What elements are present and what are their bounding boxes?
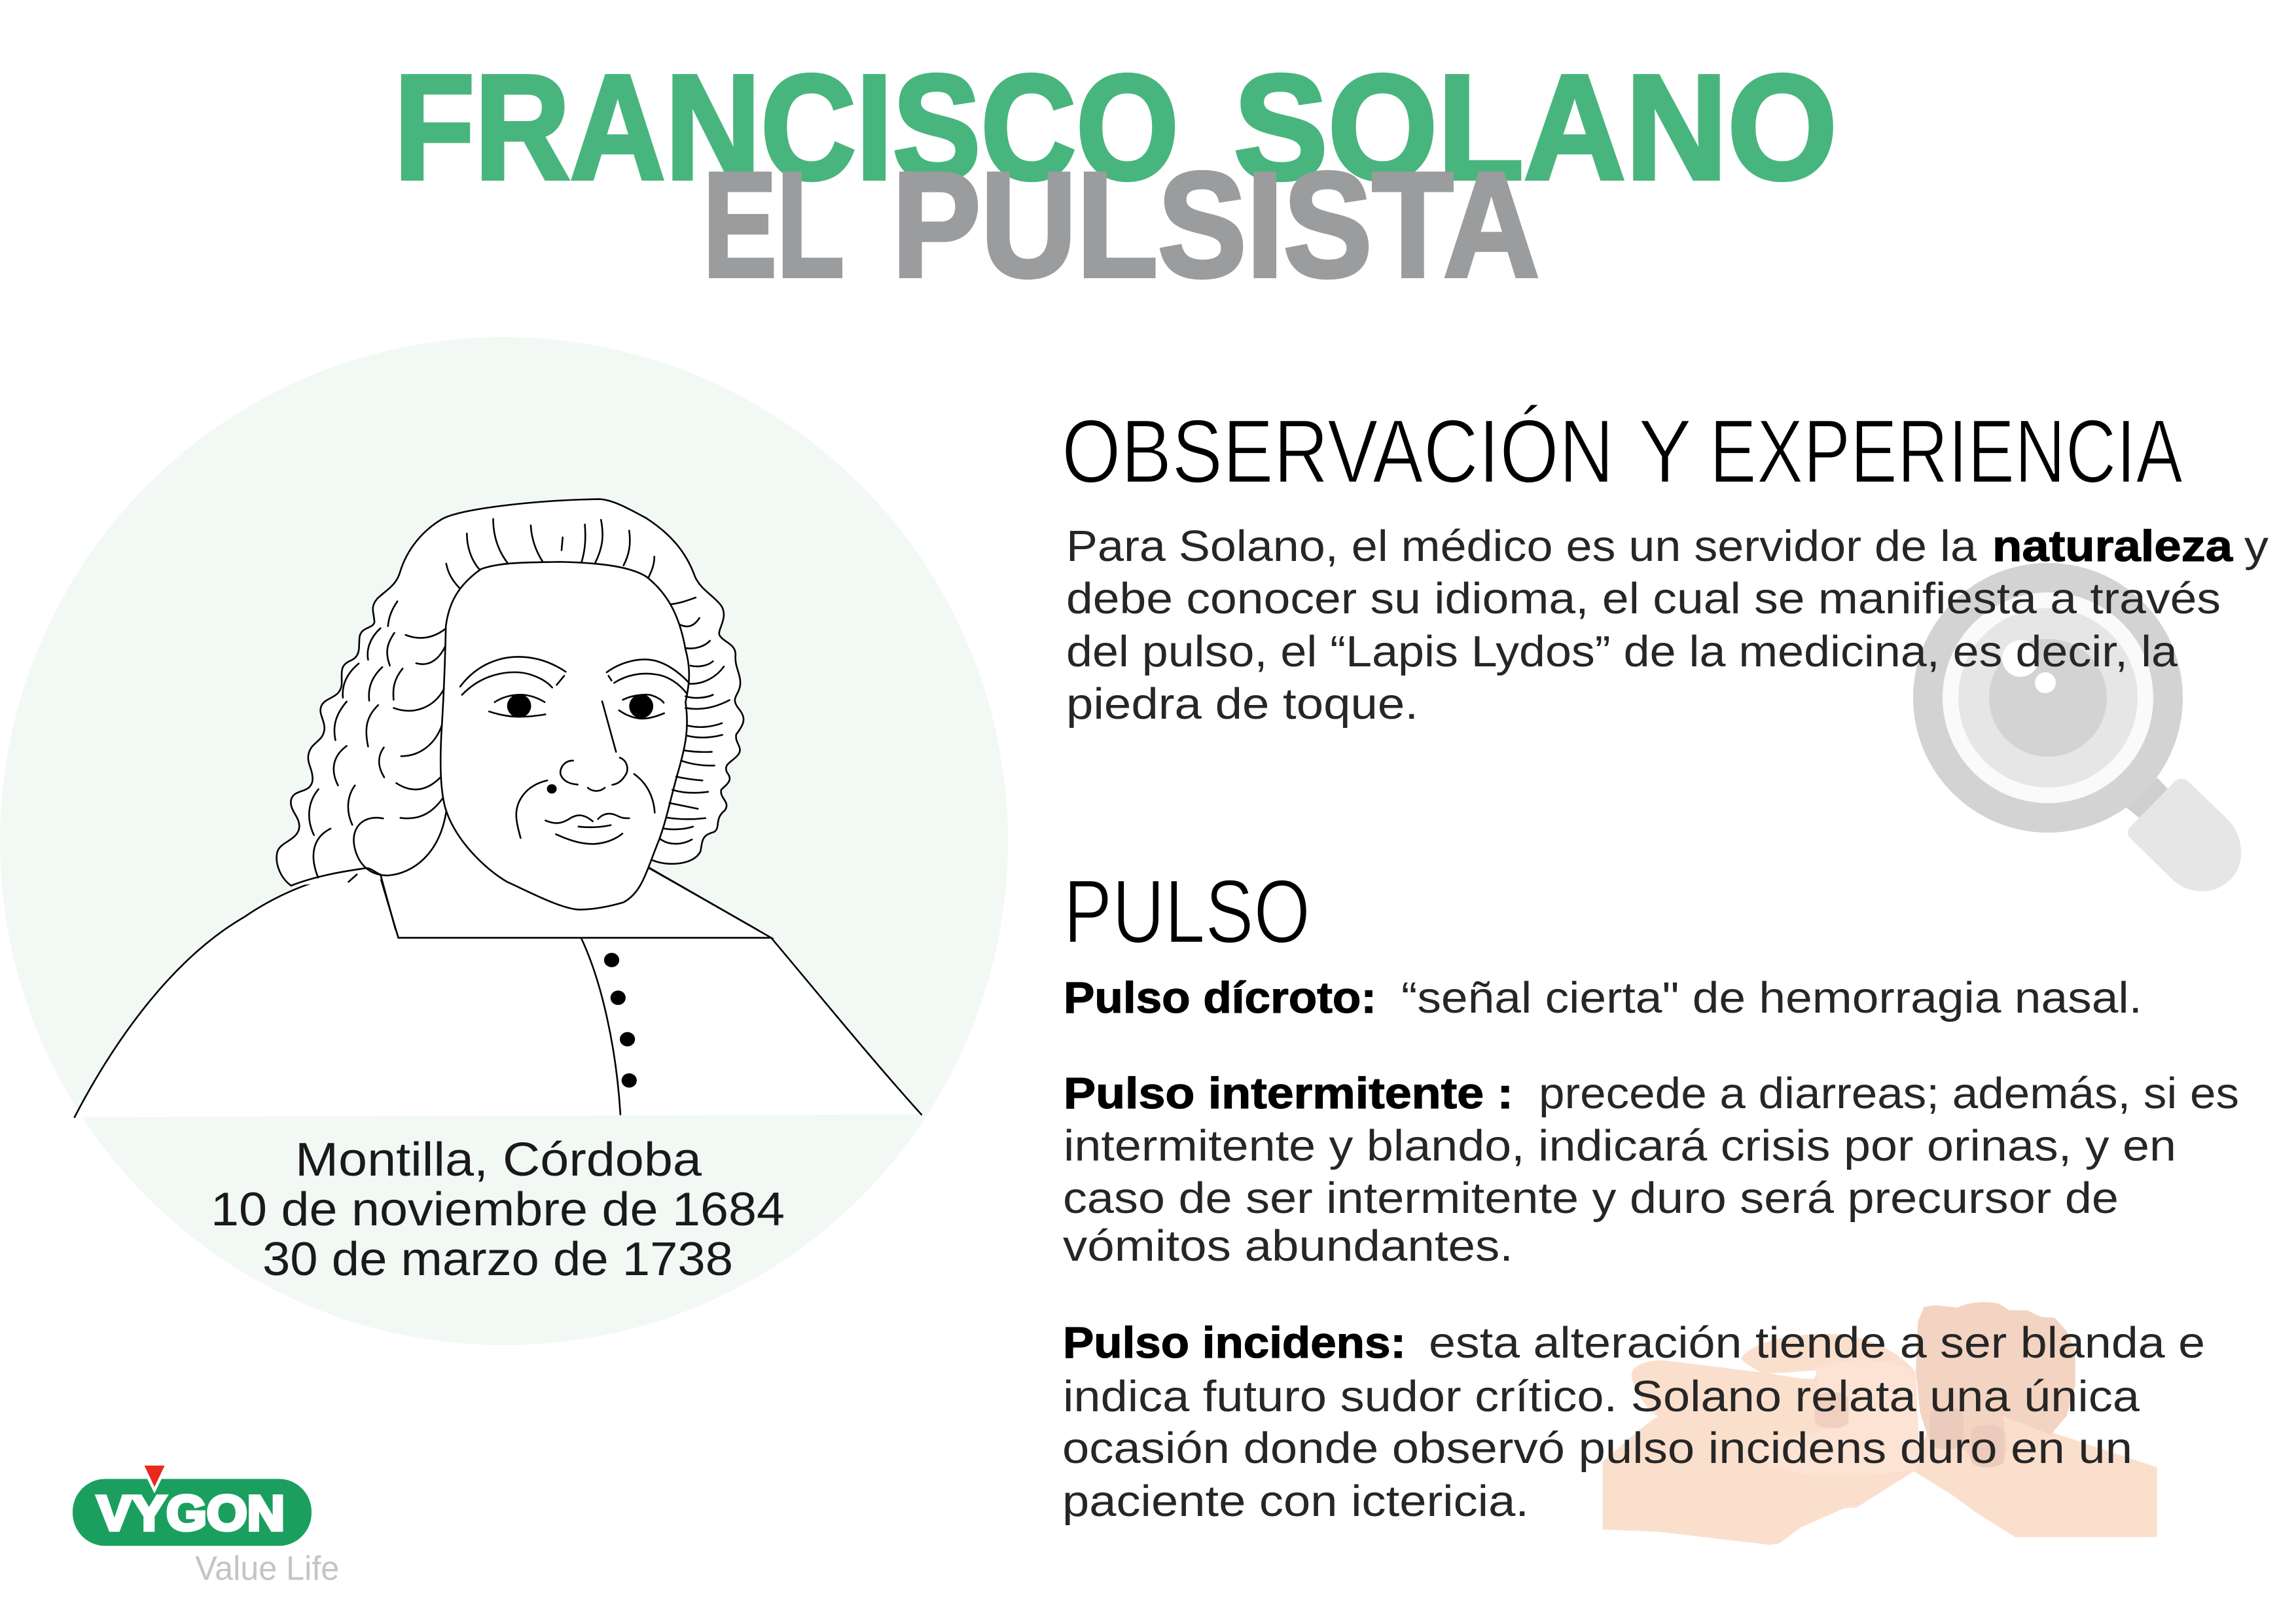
text block: pulso dícroto: Pulso dícroto: bbox=[1064, 973, 1376, 1022]
text block: pulso incidens: ocasión donde observó pulso incidens duro en un bbox=[1062, 1424, 2132, 1473]
text block: observation paragraph: debe conocer su idioma, el cual se manifiesta a través bbox=[1066, 574, 2221, 623]
text block: pulso intermitente bbox=[1063, 1069, 2239, 1271]
head, wig and face bbox=[277, 499, 757, 929]
heading: Pulso: PULSO bbox=[1064, 861, 1310, 962]
text block: pulso intermitente: caso de ser intermitente y duro será precursor de bbox=[1063, 1174, 2119, 1223]
text block: pulso intermitente: intermitente y blando, indicará crisis por orinas, y en bbox=[1064, 1121, 2176, 1170]
body and shoulders bbox=[75, 867, 922, 1117]
text block: observation paragraph: Para Solano, el médico es un servidor de la bbox=[1066, 522, 1977, 571]
text block: pulso intermitente: Pulso intermitente : bbox=[1064, 1069, 1513, 1118]
text block: pulso dícroto: “señal cierta" de hemorragia nasal. bbox=[1401, 973, 2142, 1022]
text block: pulso intermitente: precede a diarreas; además, si es bbox=[1539, 1069, 2239, 1118]
portrait of Francisco Solano bbox=[75, 499, 922, 1117]
title line: El Pulsista: EL bbox=[703, 142, 844, 308]
heading: Observación y experiencia: Y bbox=[1638, 401, 1692, 502]
text block: pulso incidens: indica futuro sudor crítico. Solano relata una única bbox=[1063, 1372, 2140, 1421]
title line: Francisco Solano bbox=[394, 45, 1837, 211]
text block: observation paragraph: del pulso, el “Lapis Lydos” de la medicina, es decir, la bbox=[1066, 627, 2178, 676]
caption: birthplace and dates bbox=[211, 1134, 785, 1286]
text block: pulso incidens: Pulso incidens: bbox=[1063, 1318, 1406, 1367]
caption: birthplace and dates: 30 de marzo de 1738 bbox=[262, 1233, 733, 1286]
caption: birthplace and dates: Montilla, Córdoba bbox=[295, 1134, 702, 1186]
title line: Francisco Solano: SOLANO bbox=[1234, 45, 1837, 211]
caption: birthplace and dates: 10 de noviembre de 1684 bbox=[211, 1183, 785, 1236]
text block: pulso intermitente: vómitos abundantes. bbox=[1063, 1221, 1513, 1271]
title line: El Pulsista: PULSISTA bbox=[892, 142, 1539, 308]
heading: Observación y experiencia bbox=[1062, 401, 2183, 502]
text block: pulso incidens: paciente con ictericia. bbox=[1062, 1477, 1529, 1526]
text block: pulso dícroto bbox=[1064, 973, 2142, 1022]
text block: observation paragraph: piedra de toque. bbox=[1066, 679, 1418, 729]
icon: hands taking a pulse bbox=[1602, 1302, 2157, 1545]
text block: observation paragraph: naturaleza bbox=[1992, 522, 2233, 571]
logo: Vygon Value Life: VYGON bbox=[97, 1485, 285, 1540]
heading: Observación y experiencia: OBSERVACIÓN bbox=[1062, 401, 1614, 502]
text block: pulso incidens bbox=[1062, 1318, 2205, 1526]
text block: observation paragraph bbox=[1066, 522, 2269, 729]
logo: Vygon Value Life bbox=[73, 1466, 339, 1587]
logo: Vygon Value Life: Value Life bbox=[195, 1549, 339, 1587]
icon: magnifying glass bbox=[1913, 563, 2241, 892]
title bbox=[394, 45, 1837, 308]
text block: pulso incidens: esta alteración tiende a ser blanda e bbox=[1429, 1318, 2205, 1367]
panel: portrait circle bbox=[0, 337, 1008, 1345]
text block: observation paragraph: y bbox=[2244, 522, 2269, 571]
title line: Francisco Solano: FRANCISCO bbox=[394, 45, 1179, 211]
